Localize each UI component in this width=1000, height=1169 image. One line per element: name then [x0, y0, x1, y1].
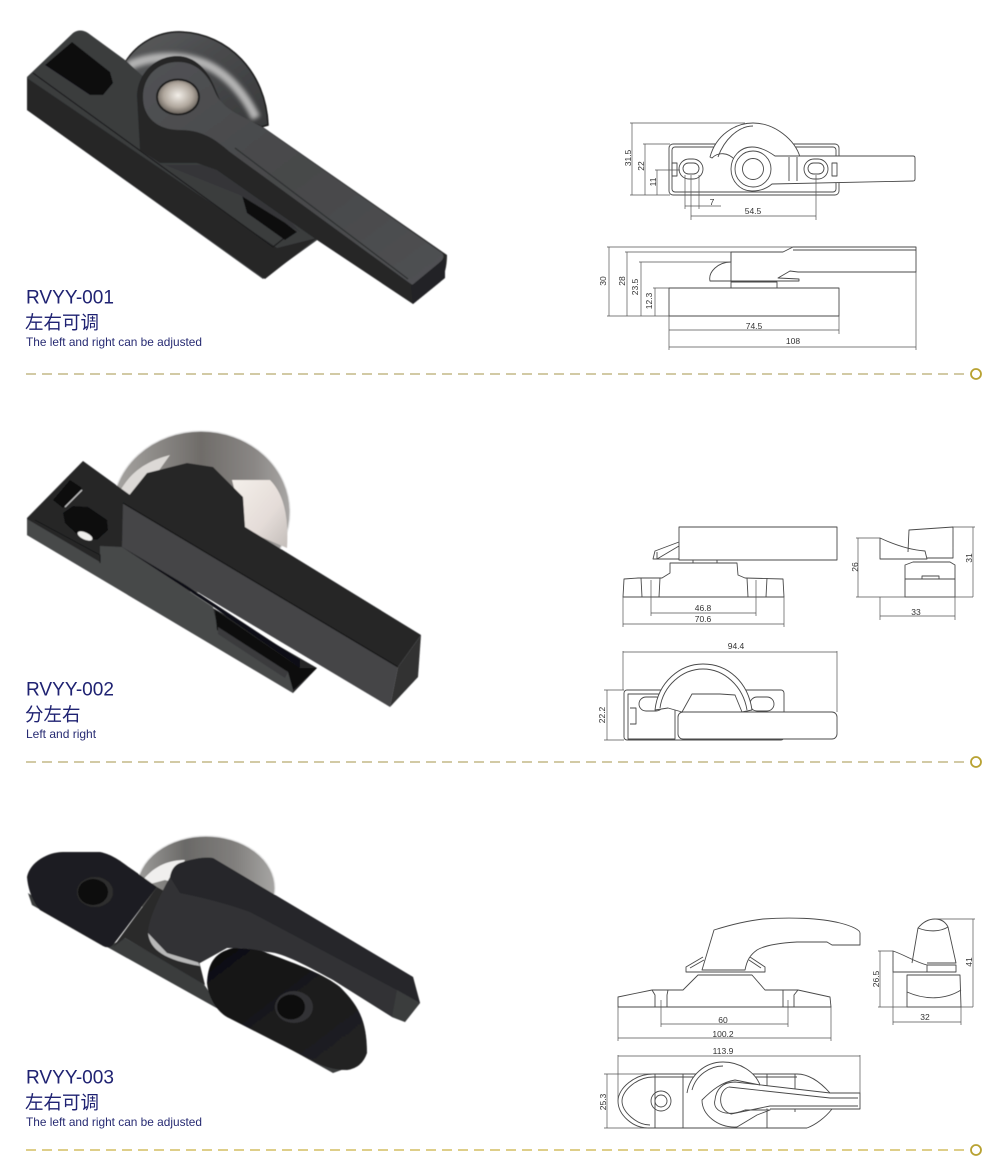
drawing: end view: 41 — [964, 957, 974, 967]
drawing: top view: 25.3 — [598, 1093, 608, 1110]
drawing: end view: 33 — [911, 607, 921, 617]
drawing: side view: 23.5 — [630, 278, 640, 295]
lever — [123, 463, 421, 667]
drawing: side view: 30 — [598, 276, 608, 286]
disc — [112, 431, 290, 593]
product label: RVYY-003: RVYY-003 — [26, 1066, 114, 1088]
drawing: end view: 31 — [964, 553, 974, 563]
drawing: end view: 32 — [920, 1012, 930, 1022]
left lobe — [27, 852, 157, 947]
drawing: side view: 12.3 — [644, 292, 654, 309]
technical drawing: RVYY-002 — [597, 527, 975, 740]
product photo: RVYY-003 lock — [27, 836, 420, 1073]
technical drawing: RVYY-001 — [598, 123, 916, 350]
drawing: end view: 26 — [850, 562, 860, 572]
product label: RVYY-003: 左右可调 — [25, 1092, 99, 1113]
product label: RVYY-002: 分左右 — [25, 704, 81, 725]
lever — [137, 56, 447, 304]
divider 3 — [26, 1145, 981, 1155]
drawing: end view: 26.5 — [871, 970, 881, 987]
product photo: RVYY-002 lock — [27, 431, 421, 707]
drawing: top view — [597, 641, 837, 740]
drawing: end view — [850, 527, 975, 620]
drawing: front view — [618, 918, 860, 1041]
product label: RVYY-003 — [25, 1066, 202, 1129]
disc — [137, 836, 275, 940]
base — [27, 461, 317, 693]
base strip — [28, 893, 347, 1073]
drawing: end view — [871, 919, 975, 1025]
drawing: front view: 46.8 — [695, 603, 712, 613]
drawing: front view: 60 — [718, 1015, 728, 1025]
divider 2 — [26, 757, 981, 767]
drawing: top view: 31.5 — [623, 149, 633, 166]
product label: RVYY-001: RVYY-001 — [26, 286, 114, 308]
product label: RVYY-001: 左右可调 — [25, 312, 99, 333]
product label: RVYY-001 — [25, 286, 202, 349]
drawing: front view — [623, 527, 837, 627]
drawing: top view: 54.5 — [745, 206, 762, 216]
technical drawing: RVYY-003 — [598, 918, 975, 1128]
product label: RVYY-003: The left and right can be adjusted — [26, 1115, 202, 1129]
drawing: side view: 28 — [617, 276, 627, 286]
drawing: top view: 22.2 — [597, 706, 607, 723]
drawing: side view: 108 — [786, 336, 800, 346]
base — [27, 30, 320, 279]
drawing: side view — [598, 247, 916, 350]
divider 1 — [26, 369, 981, 379]
drawing: top view: 113.9 — [713, 1046, 734, 1056]
lever — [148, 930, 200, 966]
drawing: side view: 74.5 — [746, 321, 763, 331]
drawing: top view — [598, 1046, 860, 1128]
drawing: top view: 94.4 — [728, 641, 745, 651]
disc — [122, 32, 268, 130]
product label: RVYY-002: Left and right — [26, 727, 97, 741]
right lobe — [207, 948, 367, 1070]
drawing: front view: 100.2 — [712, 1029, 734, 1039]
product label: RVYY-002 — [25, 678, 114, 741]
drawing: front view: 70.6 — [695, 614, 712, 624]
drawing: top view: 11 — [648, 177, 658, 186]
drawing: top view: 22 — [636, 161, 646, 171]
drawing: top view — [623, 123, 915, 220]
product label: RVYY-002: RVYY-002 — [26, 678, 114, 700]
drawing: top view: 7 — [710, 197, 715, 207]
product photo: RVYY-001 lock — [27, 30, 447, 304]
product label: RVYY-001: The left and right can be adjusted — [26, 335, 202, 349]
